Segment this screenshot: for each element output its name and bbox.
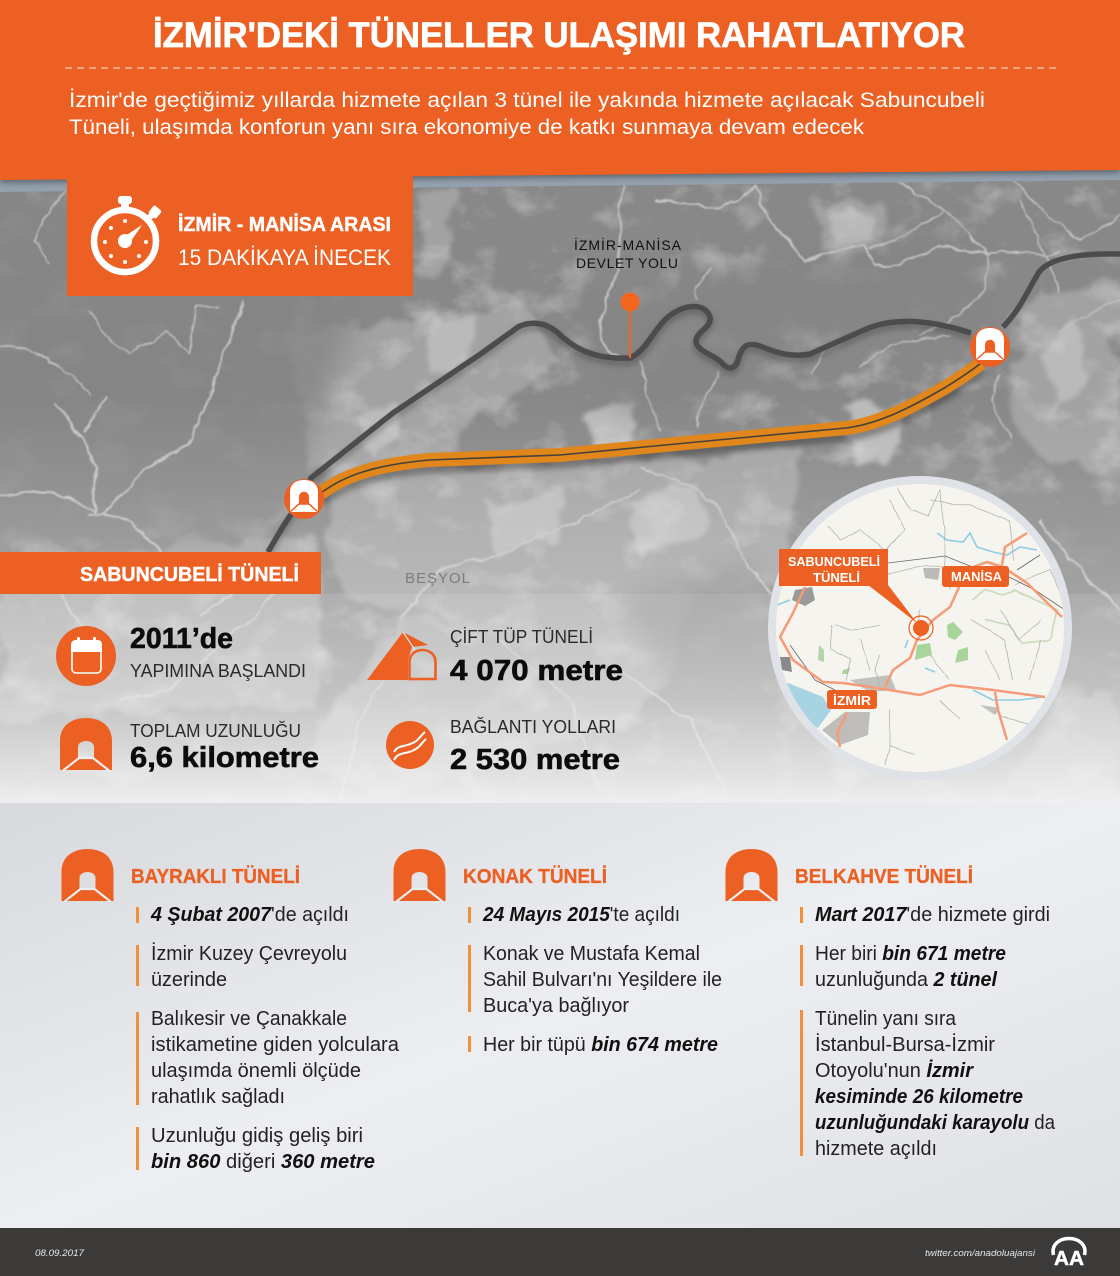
column: Konak: Buca'ya bağlıyor (483, 995, 629, 1017)
stat: total length: TOPLAM UZUNLUĞU (130, 720, 301, 741)
column: Konak: Konak ve Mustafa Kemal (483, 943, 700, 965)
subtitle: İzmir'de geçtiğimiz yıllarda hizmete açılan 3 tünel ile yakında hizmete açılacak Sabuncubeli (69, 89, 985, 112)
column: Belkahve: hizmete açıldı (815, 1138, 937, 1160)
state road (268, 254, 1120, 556)
banner: Sabuncubeli: SABUNCUBELİ TÜNELİ (80, 563, 299, 586)
callout text: 15 DAKİKAYA İNECEK (178, 245, 391, 270)
title: İZMİR'DEKİ TÜNELLER ULAŞIMI RAHATLATIYOR (153, 16, 965, 55)
date: 08.09.2017 (35, 1248, 85, 1259)
column: Bayraklı: üzerinde (151, 969, 227, 991)
darker forest zones (0, 192, 1114, 672)
column: Bayraklı: istikametine giden yolculara (151, 1034, 400, 1056)
column: Bayraklı: 4 Şubat 2007'de açıldı (150, 904, 349, 926)
terrain texture (0, 181, 1120, 749)
column: Konak (394, 849, 722, 1056)
social handle: twitter.com/anadoluajansi (925, 1248, 1036, 1259)
label: Manisa: MANİSA (951, 569, 1003, 584)
label: Sabuncubeli: TÜNELİ (813, 570, 860, 585)
icon: tunnel (394, 849, 446, 902)
locator map (768, 476, 1072, 780)
heading: KONAK TÜNELİ (463, 865, 607, 888)
column: Belkahve: İstanbul-Bursa-İzmir (815, 1033, 995, 1056)
footer (0, 1228, 1120, 1276)
stat: twin tube: 4 070 metre (450, 655, 623, 687)
callout text (178, 213, 391, 270)
fade overlays (0, 456, 1120, 594)
label: state road: İZMİR-MANİSA (574, 236, 682, 253)
column: Belkahve: Mart 2017'de hizmete girdi (815, 904, 1050, 926)
label: Manisa (942, 566, 1009, 587)
icon: tunnel (62, 849, 114, 902)
subtitle (69, 89, 985, 139)
stat: link roads: 2 530 metre (450, 744, 620, 776)
column: Bayraklı: Uzunluğu gidiş geliş biri (151, 1125, 363, 1147)
header (0, 0, 1120, 183)
icon: tunnel (726, 849, 778, 902)
label: İzmir (827, 690, 877, 709)
stat: total length: 6,6 kilometre (130, 742, 319, 774)
column: Belkahve: uzunluğundaki karayolu da (815, 1112, 1056, 1134)
column: Bayraklı: Balıkesir ve Çanakkale (151, 1008, 347, 1030)
label: Sabuncubeli: SABUNCUBELİ (788, 554, 880, 569)
column: Belkahve: Otoyolu'nun İzmir (815, 1059, 974, 1082)
lower panel background (0, 803, 1120, 1229)
map forests (818, 622, 968, 674)
logo (1053, 1238, 1085, 1270)
map highways (780, 533, 1062, 747)
column: Belkahve: Her biri bin 671 metre (815, 943, 1006, 965)
map water (776, 533, 1043, 728)
stat: twin tube (367, 627, 623, 687)
stat: link roads: BAĞLANTI YOLLARI (450, 716, 616, 737)
label: state road (574, 236, 682, 358)
marker: tunnel east (970, 327, 1010, 367)
locator pointer (868, 585, 933, 640)
label: İzmir: İZMİR (833, 693, 872, 708)
column: Bayraklı (62, 849, 400, 1173)
light roads (0, 170, 1120, 800)
column: Konak: Sahil Bulvarı'nı Yeşildere ile (483, 969, 722, 991)
map background (0, 165, 1120, 810)
column: Bayraklı: bin 860 diğeri 360 metre (151, 1151, 375, 1173)
stat: link roads (386, 716, 620, 776)
column: Konak: Her bir tüpü bin 674 metre (483, 1034, 718, 1056)
label: state road: DEVLET YOLU (576, 255, 678, 271)
label: Beşyol: BEŞYOL (405, 570, 470, 587)
callout: travel time (67, 171, 413, 296)
label: Sabuncubeli (779, 549, 888, 586)
column: Bayraklı: rahatlık sağladı (151, 1086, 285, 1108)
stat: twin tube: ÇİFT TÜP TÜNELİ (450, 627, 593, 647)
column: Bayraklı: ulaşımda önemli ölçüde (151, 1060, 361, 1082)
icon: stopwatch (94, 196, 162, 272)
stat: total length (60, 718, 319, 774)
map railway (790, 555, 1065, 690)
Sabuncubeli tunnel route (321, 363, 981, 499)
marker: tunnel west (284, 479, 324, 519)
map minor roads (827, 488, 1060, 765)
column: Belkahve: uzunluğunda 2 tünel (815, 969, 997, 991)
column: Bayraklı: İzmir Kuzey Çevreyolu (151, 942, 347, 965)
terrain patches (0, 185, 1120, 800)
stat: start year (56, 623, 306, 686)
callout text: İZMİR - MANİSA ARASI (178, 213, 391, 236)
column: Belkahve: kesiminde 26 kilometre (815, 1086, 1023, 1108)
column: Konak: 24 Mayıs 2015'te açıldı (482, 904, 680, 926)
heading: BELKAHVE TÜNELİ (795, 865, 973, 888)
stat: start year: 2011’de (130, 623, 233, 655)
column: Belkahve: Tünelin yanı sıra (815, 1008, 957, 1030)
subtitle: Tüneli, ulaşımda konforun yanı sıra ekonomiye de katkı sunmaya devam edecek (69, 116, 865, 139)
logo: AA (1054, 1248, 1084, 1270)
map urban areas (780, 568, 1000, 745)
banner: Sabuncubeli (0, 552, 321, 594)
column: Belkahve (726, 849, 1056, 1160)
heading: BAYRAKLI TÜNELİ (131, 865, 300, 888)
stat: start year: YAPIMINA BAŞLANDI (130, 661, 306, 681)
